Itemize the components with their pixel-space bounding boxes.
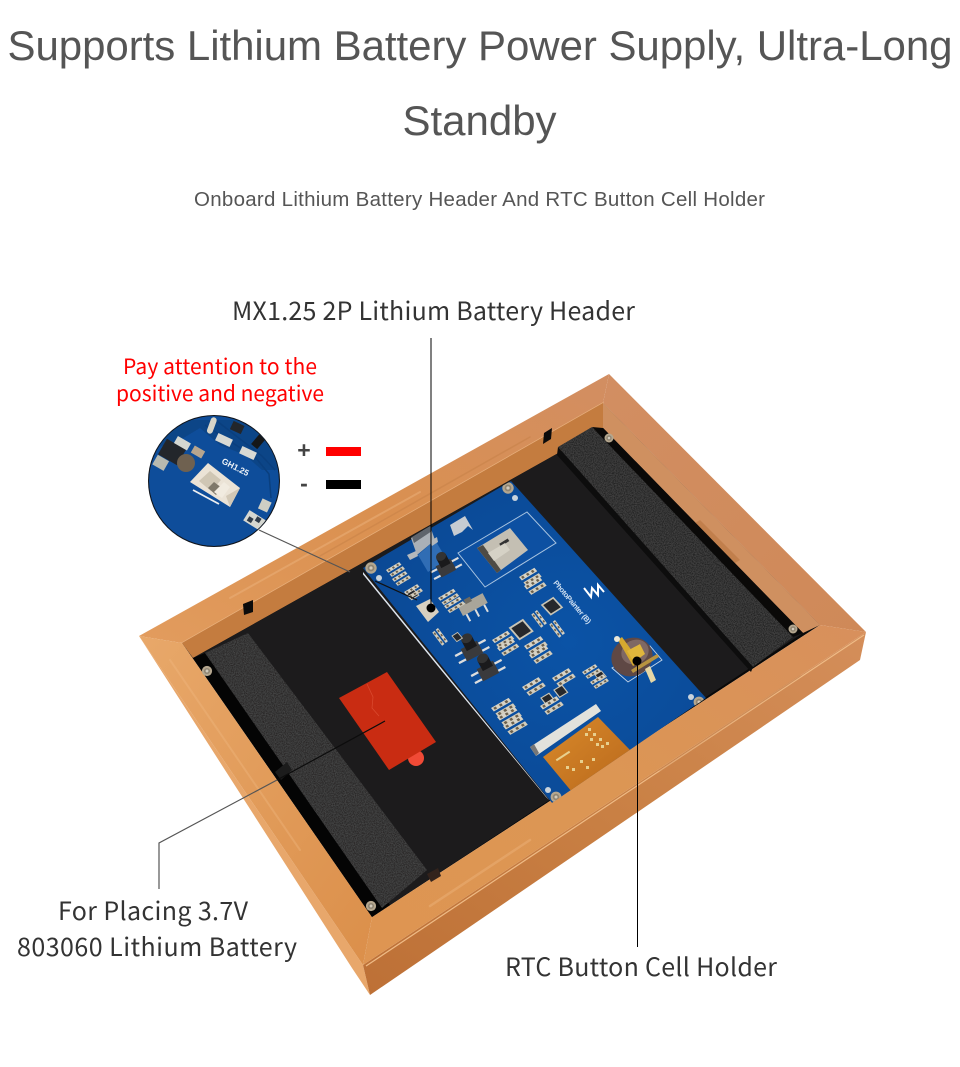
polarity legend: - <box>300 470 308 496</box>
leader: battery placement <box>159 721 385 889</box>
wooden frame with PCB <box>139 374 866 995</box>
polarity legend <box>297 437 361 496</box>
foam strip left <box>205 633 427 908</box>
wood streaks <box>170 403 800 906</box>
SD card slot <box>458 512 556 587</box>
label: battery placement <box>17 892 297 964</box>
frame outer faces <box>139 374 866 995</box>
shadow gap left <box>193 653 390 917</box>
waveshare logo <box>584 585 604 597</box>
leader: inset to header <box>259 530 417 600</box>
title <box>8 22 952 144</box>
label: battery placement: For Placing 3.7V <box>58 892 249 928</box>
label: battery placement: 803060 Lithium Battery <box>17 928 297 964</box>
board name: PhotoPainter (B) <box>551 579 593 626</box>
title: Standby <box>402 97 557 144</box>
buttons <box>430 552 506 684</box>
label: battery header: MX1.25 2P Lithium Battery Header <box>232 292 635 328</box>
board screws <box>365 482 704 802</box>
USB-C port <box>407 526 442 572</box>
callout: polarity warning: positive and negative <box>116 378 324 408</box>
inset label GH1.25: GH1.25 <box>220 456 251 478</box>
inset: connector close-up <box>148 415 280 547</box>
slide switch <box>458 593 489 622</box>
subtitle: Onboard Lithium Battery Header And RTC Button Cell Holder <box>194 188 765 211</box>
black backing base <box>182 403 820 917</box>
frame clips and screws <box>202 428 797 911</box>
pad groups <box>386 562 609 735</box>
polarity legend: + <box>297 437 311 463</box>
inner walls <box>182 403 820 658</box>
leader: RTC holder <box>632 656 642 947</box>
foam strip right <box>557 427 793 672</box>
shadow gap right <box>592 427 803 640</box>
red sticker <box>339 672 436 770</box>
PCB board <box>362 481 706 803</box>
callout: polarity warning <box>116 351 324 408</box>
label: RTC holder: RTC Button Cell Holder <box>505 948 777 984</box>
leader: battery header <box>426 338 436 612</box>
silkscreen pad <box>450 516 473 536</box>
callout: polarity warning: Pay attention to the <box>123 351 317 381</box>
black backing board <box>193 428 803 917</box>
FPC ribbon and connector <box>530 704 630 792</box>
battery header connector <box>416 599 439 622</box>
inset components <box>152 416 272 530</box>
RTC button cell holder <box>611 636 663 683</box>
ICs <box>405 588 607 706</box>
title: Supports Lithium Battery Power Supply, Ultra-Long <box>8 22 952 69</box>
inset white header <box>190 463 240 507</box>
